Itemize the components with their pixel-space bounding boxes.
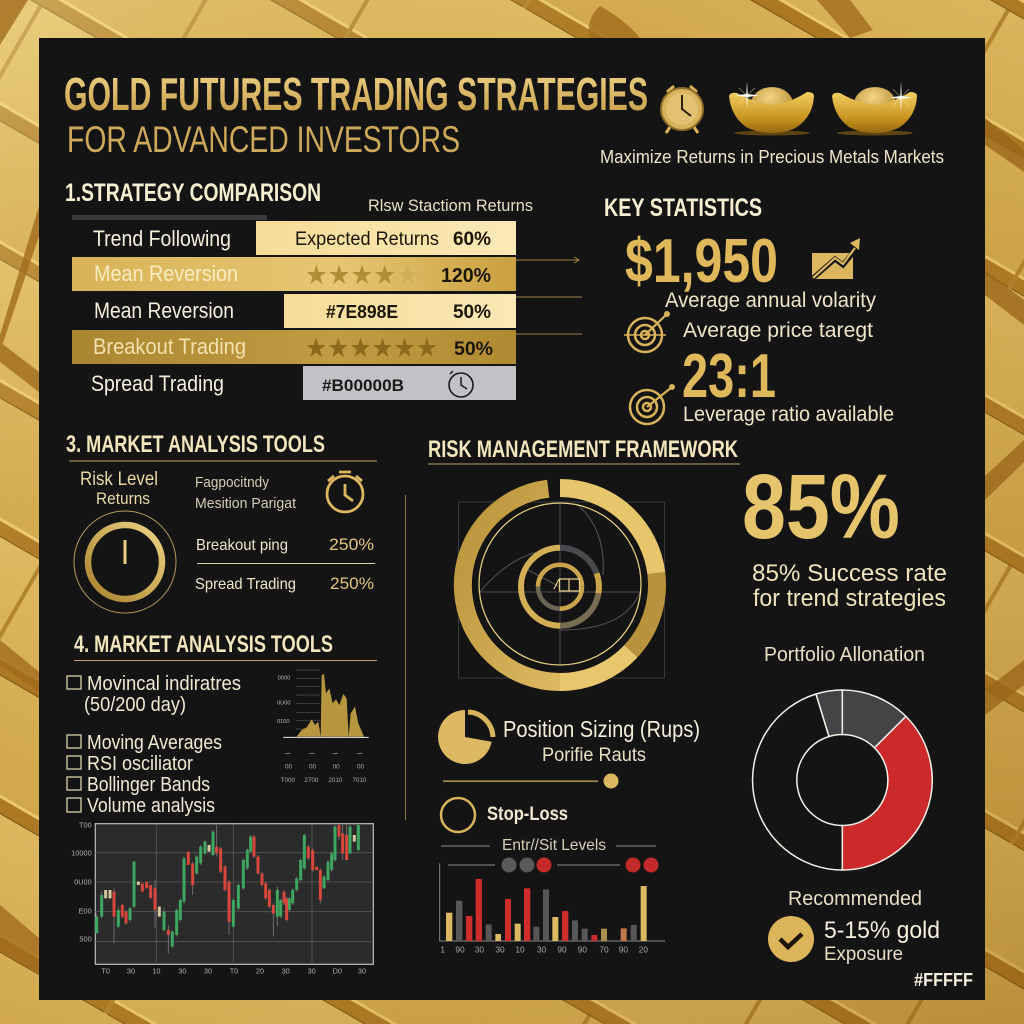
chart: concentric risk rings	[458, 488, 664, 682]
row: spread trading	[91, 366, 516, 400]
icon: target	[630, 384, 674, 424]
slider	[443, 774, 618, 788]
chart: mini volume chart: 00	[309, 763, 317, 770]
chart: candlestick chart: 30	[127, 966, 135, 975]
icon: gold ingot	[729, 81, 814, 136]
checklist: Movincal indiratres	[87, 673, 241, 695]
stat: price: $1,950	[625, 227, 778, 296]
heading: risk management: RISK MANAGEMENT FRAMEWORK	[428, 436, 739, 463]
text: frequency: Mesition Parigat	[195, 495, 297, 512]
heading: strategy comparison: 1.STRATEGY COMPARISON	[65, 179, 321, 207]
text: position sizing: Porifie Rauts	[542, 745, 646, 766]
label: risk level returns: Returns	[96, 489, 150, 508]
text: success rate	[752, 560, 947, 612]
chart: entry and exit bars: 10	[515, 944, 525, 954]
row: breakout trading: 50%	[454, 339, 493, 360]
chart: candlestick chart: E00	[79, 906, 92, 915]
chart: mini volume chart: T000	[281, 777, 296, 784]
row: breakout: 250%	[329, 535, 374, 554]
stat: 85 percent: 85%	[742, 456, 900, 558]
text: success rate: for trend strategies	[753, 585, 946, 612]
chart: candlestick chart: 30	[358, 966, 366, 975]
row: mean reversion: 50%	[453, 302, 491, 323]
row: breakout	[196, 535, 374, 554]
chart: mini volume chart: 7010	[352, 777, 367, 784]
chart: candlestick chart: D0	[333, 966, 342, 975]
chart: candlestick chart: 0U00	[74, 877, 92, 886]
row: trend following: Expected Returns	[295, 229, 439, 250]
chart: allocation donut	[753, 690, 932, 870]
stat: leverage: 23:1	[682, 342, 776, 411]
chart: candlestick chart: 30	[204, 966, 212, 975]
panel: portfolio allocation	[753, 644, 973, 990]
chart: candlestick chart: 20	[256, 966, 264, 975]
text: frequency	[195, 474, 297, 512]
label: risk level returns: Risk Level	[80, 469, 158, 490]
label: recommended: Recommended	[788, 888, 922, 910]
chart: mini volume chart: 0100	[277, 719, 290, 725]
chart: candlestick chart	[71, 821, 373, 975]
heading: market analysis tools 3: 3. MARKET ANALYSIS TOOLS	[66, 431, 325, 458]
text: position sizing: Position Sizing (Rups)	[503, 716, 700, 742]
label: leverage ratio: Leverage ratio available	[683, 403, 894, 426]
heading: key statistics: KEY STATISTICS	[604, 194, 762, 222]
row: spread	[195, 574, 374, 593]
panel: market analysis tools 4	[67, 631, 377, 975]
chart: entry and exit bars: 90	[557, 944, 567, 954]
label: hex code: #FFFFF	[914, 970, 973, 990]
chart: candlestick chart: 10	[152, 966, 160, 975]
panel: risk management framework	[428, 436, 740, 954]
panel: strategy comparison	[65, 179, 533, 400]
chart: candlestick chart: 30	[178, 966, 186, 975]
chart: entry and exit bars	[440, 863, 665, 954]
chart: mini volume chart: 0U00	[277, 700, 291, 706]
icon: stopwatch	[327, 472, 363, 512]
row: mean reversion stars: Mean Reversion	[94, 261, 238, 286]
row: trend following: Trend Following	[93, 226, 231, 251]
chart: mini volume chart: 2700	[304, 777, 319, 784]
chart: mini volume chart: 00	[333, 763, 340, 770]
checklist: Moving Averages	[87, 732, 222, 754]
chart: candlestick chart: 30	[282, 966, 290, 975]
label: stop-loss: Stop-Loss	[487, 804, 568, 825]
heading: market analysis tools 4: 4. MARKET ANALYSIS TOOLS	[74, 631, 333, 658]
checklist: Volume analysis	[87, 795, 215, 817]
icon: gold ingot	[832, 81, 917, 136]
checklist	[67, 673, 241, 817]
chart: candlestick chart: 500	[79, 935, 92, 944]
checklist: RSI osciliator	[87, 753, 193, 775]
icon: check badge	[768, 916, 814, 962]
row: mean reversion: Mean Reversion	[94, 298, 234, 323]
chart: candlestick chart: T0	[230, 966, 238, 975]
icon: alarm clock	[661, 86, 703, 133]
level markers	[502, 858, 658, 872]
row: spread trading: Spread Trading	[91, 371, 224, 396]
chart: candlestick chart: 10000	[71, 849, 92, 858]
row: breakout trading: Breakout Trading	[93, 334, 246, 359]
tagline: Maximize Returns in Precious Metals Markets	[600, 147, 944, 167]
row: mean reversion stars: 120%	[441, 265, 491, 287]
chart: mini volume chart: 00	[357, 763, 365, 770]
text: exposure: Exposure	[824, 944, 903, 965]
panel: market analysis tools 3	[66, 431, 377, 613]
chart: entry and exit bars: 90	[619, 944, 628, 954]
row: breakout trading	[72, 330, 516, 364]
chart: candlestick chart: 30	[308, 966, 316, 975]
icon: stop-loss ring	[441, 798, 475, 832]
arrow: connector lines to key statistics	[516, 257, 582, 334]
text: exposure	[824, 917, 940, 965]
icon: position sizing pie	[438, 710, 493, 764]
row: mean reversion	[94, 294, 516, 328]
chart: mini volume chart: 2010	[328, 777, 343, 784]
row: spread trading: #B00000B	[322, 376, 404, 395]
row: spread: 250%	[330, 574, 374, 593]
title: GOLD FUTURES TRADING STRATEGIES	[64, 68, 648, 120]
checklist: Bollinger Bands	[87, 774, 210, 796]
chart: entry and exit bars: 1	[440, 944, 445, 954]
column header: Rlsw Stactiom Returns	[368, 196, 533, 215]
chart: entry and exit bars: 90	[578, 944, 587, 954]
chart: entry and exit bars: 30	[537, 944, 547, 954]
text: success rate: 85% Success rate	[752, 560, 947, 587]
row: mean reversion stars	[72, 257, 516, 291]
chart: entry and exit bars: 90	[455, 944, 465, 954]
chart: entry and exit bars: 30	[495, 944, 505, 954]
chart: candlestick chart: T0	[101, 966, 110, 975]
row: spread: Spread Trading	[195, 576, 296, 593]
chart: mini volume chart: 00	[285, 763, 293, 770]
panel: key statistics	[604, 194, 894, 426]
text: exposure: 5-15% gold	[824, 917, 940, 944]
icon: rising chart	[812, 238, 860, 279]
chart: mini volume chart	[277, 670, 369, 784]
chart: candlestick chart: T00	[79, 821, 92, 830]
row: mean reversion: #7E898E	[326, 302, 398, 322]
row: mean reversion stars: ★★★★★	[305, 260, 419, 291]
subtitle: FOR ADVANCED INVESTORS	[67, 119, 460, 160]
label: price target: Average price taregt	[683, 319, 873, 342]
heading: portfolio allocation: Portfolio Allonation	[764, 644, 925, 666]
icon: target	[624, 312, 670, 352]
row: trend following	[93, 221, 516, 255]
row: breakout: Breakout ping	[196, 537, 288, 554]
label: entry exit levels: Entr//Sit Levels	[502, 837, 606, 854]
checklist: (50/200 day)	[84, 694, 186, 716]
gauge	[74, 511, 176, 613]
chart: entry and exit bars: 30	[475, 944, 484, 954]
chart: entry and exit bars: 20	[639, 944, 648, 954]
chart: mini volume chart: 0000	[278, 675, 290, 681]
text: position sizing	[503, 716, 700, 766]
label: annual volatility: Average annual volarity	[665, 289, 876, 312]
row: trend following: 60%	[453, 229, 491, 250]
chart: entry and exit bars: 70	[599, 944, 609, 954]
row: breakout trading: ★★★★★★	[305, 333, 438, 364]
label: risk level returns	[80, 469, 158, 508]
text: frequency: Fagpocitndy	[195, 474, 269, 491]
